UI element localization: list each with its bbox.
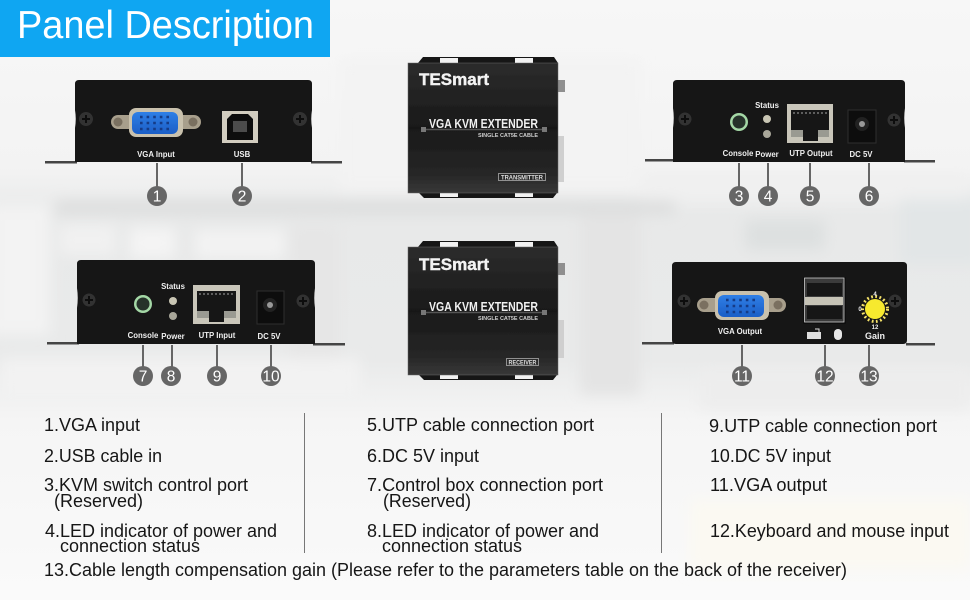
device panel: transmitter rear (Console, Status, UTP, DC) — [645, 80, 935, 162]
gain dial — [858, 292, 888, 331]
callouts 3-6 — [729, 163, 879, 206]
device panel: transmitter rear (Console, Status, UTP, DC): Console — [723, 149, 754, 158]
device panel: transmitter rear (Console, Status, UTP, DC): UTP Output — [789, 149, 833, 158]
device panel: transmitter front (VGA, USB): VGA Input — [137, 150, 175, 159]
callouts 3-6: 6 — [865, 188, 873, 206]
LEDs — [763, 115, 771, 138]
device: receiver top view: RECEIVER — [508, 360, 537, 366]
description column 1: 3.KVM switch control port — [44, 474, 248, 495]
description column 2: 7.Control box connection port — [367, 474, 603, 495]
device panel: transmitter front (VGA, USB): USB — [234, 150, 251, 159]
device: receiver top view: SINGLE CAT5E CABLE — [478, 316, 538, 322]
description column 2: 6.DC 5V input — [367, 445, 479, 466]
device: receiver top view — [408, 241, 565, 380]
callouts 7-10: 8 — [167, 368, 175, 386]
description column 1: 4.LED indicator of power and — [45, 520, 277, 541]
DC jack — [257, 291, 284, 324]
description column 1 — [44, 414, 277, 556]
title banner: Panel Description — [17, 4, 314, 47]
description column 3: 11.VGA output — [710, 474, 827, 495]
description column 1: connection status — [60, 535, 200, 556]
USB double port — [803, 277, 846, 324]
callouts 7-10: 9 — [213, 368, 221, 386]
description column 3: 12.Keyboard and mouse input — [710, 520, 949, 541]
callouts 1-2: 2 — [238, 188, 246, 206]
callouts 11-13: 13 — [860, 368, 878, 386]
description column 2: 5.UTP cable connection port — [367, 414, 594, 435]
device panel: receiver rear (Console, Status, UTP, DC): DC 5V — [258, 332, 281, 341]
UTP port — [787, 104, 833, 143]
device panel: transmitter rear (Console, Status, UTP, DC): Status — [755, 101, 780, 110]
callouts 7-10 — [133, 345, 281, 386]
device: receiver top view: VGA KVM EXTENDER — [429, 300, 538, 314]
description column 3 — [709, 415, 949, 541]
description column 2: connection status — [382, 535, 522, 556]
description column 3: 9.UTP cable connection port — [709, 415, 937, 436]
device panel: transmitter rear (Console, Status, UTP, DC): DC 5V — [850, 150, 873, 159]
device panel: receiver front (VGA, USB, Gain): Gain — [865, 331, 885, 341]
description column 1: (Reserved) — [54, 490, 143, 511]
callouts 7-10: 10 — [262, 368, 280, 386]
device: transmitter top view: TESmart — [419, 70, 489, 89]
screws — [79, 112, 307, 126]
device panel: receiver rear (Console, Status, UTP, DC): Console — [128, 331, 159, 340]
callouts 11-13 — [732, 345, 879, 386]
description item 13: 13.Cable length compensation gain (Please refer to the parameters table on the back of the receiver) — [44, 559, 847, 580]
console jack — [730, 113, 748, 131]
callouts 1-2 — [147, 163, 252, 206]
description column 3: 10.DC 5V input — [710, 445, 831, 466]
callouts 3-6: 5 — [806, 188, 814, 206]
device panel: receiver front (VGA, USB, Gain) — [642, 262, 935, 346]
device panel: receiver rear (Console, Status, UTP, DC): Power — [161, 332, 185, 341]
VGA connector — [111, 108, 201, 137]
LEDs — [169, 297, 177, 320]
device: transmitter top view: TRANSMITTER — [501, 175, 544, 181]
device panel: receiver rear (Console, Status, UTP, DC) — [47, 260, 345, 346]
description column 1: 2.USB cable in — [44, 445, 162, 466]
callouts 11-13: 11 — [734, 368, 750, 386]
callouts 3-6: 4 — [764, 188, 773, 206]
console jack — [134, 295, 152, 313]
callouts 11-13: 12 — [816, 368, 834, 386]
device: transmitter top view: VGA KVM EXTENDER — [429, 117, 538, 131]
device panel: receiver rear (Console, Status, UTP, DC): Status — [161, 282, 186, 291]
callouts 3-6: 3 — [735, 188, 743, 206]
device panel: transmitter front (VGA, USB) — [45, 80, 342, 164]
gain dial: 0 — [858, 307, 862, 313]
VGA connector — [697, 291, 786, 320]
device: transmitter top view: SINGLE CAT5E CABLE — [478, 133, 538, 139]
callouts 7-10: 7 — [139, 368, 147, 386]
description column 2 — [367, 414, 603, 556]
device panel: transmitter rear (Console, Status, UTP, DC): Power — [755, 150, 779, 159]
USB connector — [222, 111, 258, 143]
device panel: receiver front (VGA, USB, Gain): VGA Output — [718, 327, 763, 336]
description column 2: (Reserved) — [383, 490, 471, 511]
description column 2: 8.LED indicator of power and — [367, 520, 599, 541]
title banner — [0, 0, 330, 57]
gain dial: 4 — [873, 292, 877, 298]
gain dial: 12 — [872, 325, 879, 331]
callouts 1-2: 1 — [153, 188, 161, 206]
device: receiver top view: TESmart — [419, 255, 489, 274]
description column 1: 1.VGA input — [44, 414, 140, 435]
keyboard and mouse icons — [807, 329, 842, 340]
device panel: receiver rear (Console, Status, UTP, DC): UTP Input — [199, 331, 236, 340]
DC jack — [848, 110, 876, 143]
device: transmitter top view — [408, 57, 565, 198]
UTP port — [193, 285, 240, 324]
